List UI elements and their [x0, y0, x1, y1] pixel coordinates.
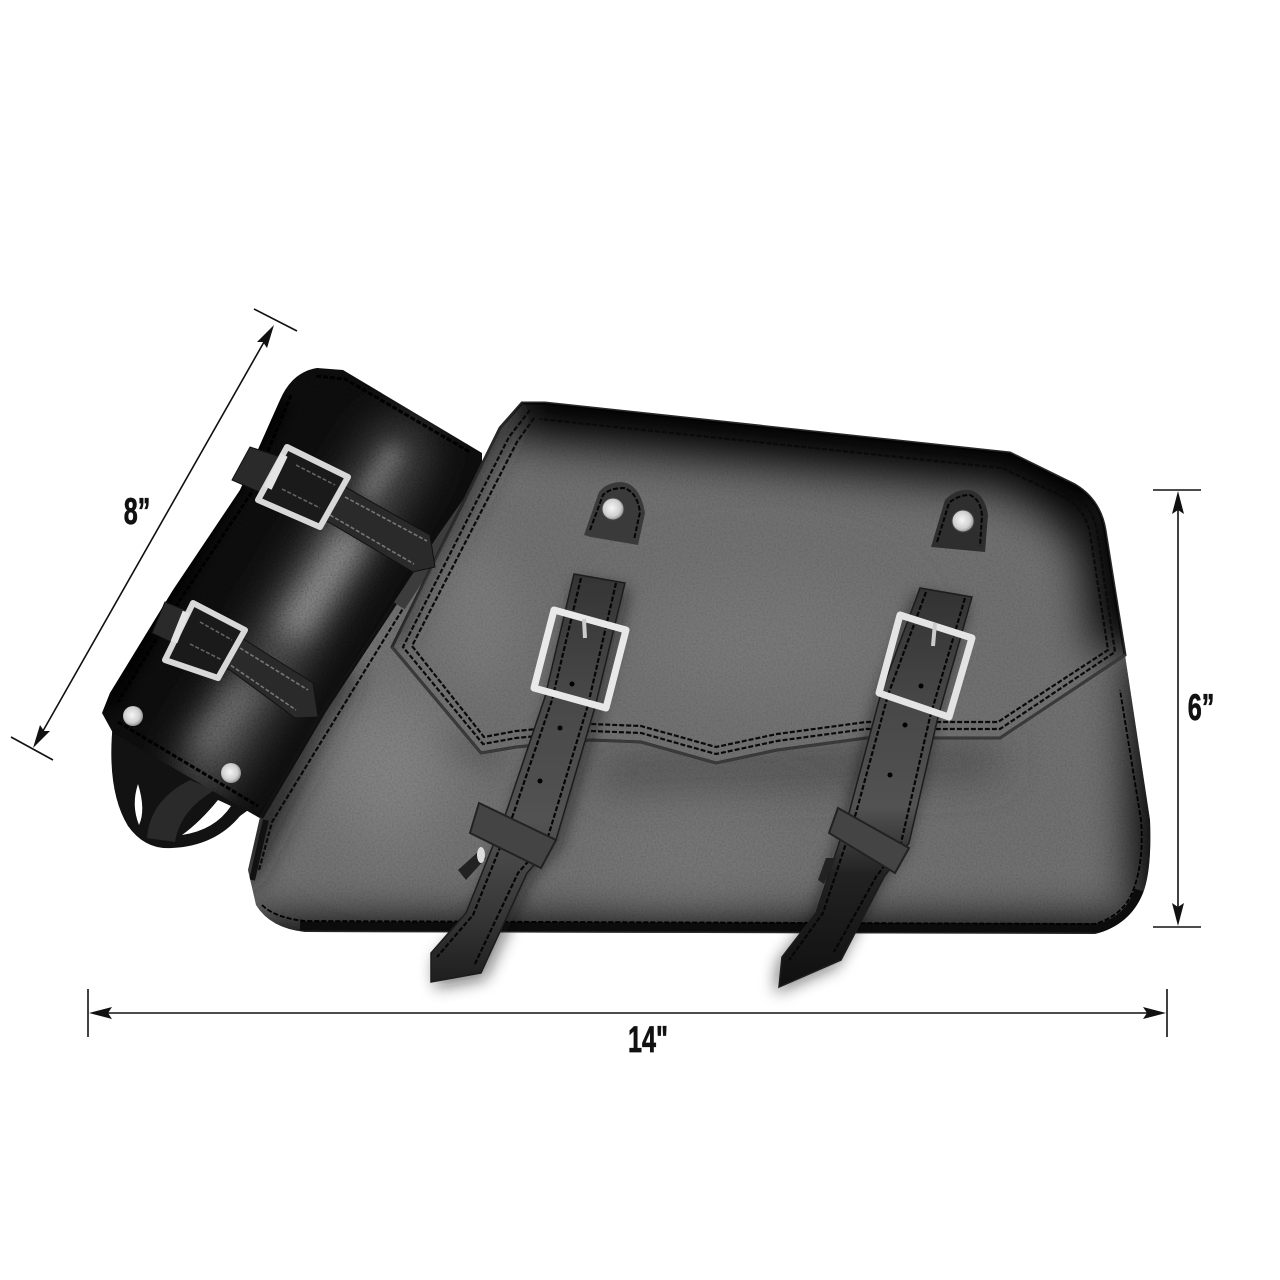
flap: double stitching: [403, 410, 1115, 754]
label: 14": [628, 1018, 668, 1060]
tool roll: rivets: [123, 706, 241, 783]
main bag: flap: [380, 385, 1142, 770]
label: 8”: [124, 490, 150, 532]
snap tab left: [584, 482, 645, 545]
tool roll: stitching: [118, 376, 470, 806]
rivet: [602, 498, 624, 520]
label: 6”: [1188, 686, 1214, 728]
main bag: body panel: [248, 500, 1150, 934]
tool roll: upper strap and buckle: [232, 447, 435, 572]
left strap with buckle and keeper: [431, 574, 629, 988]
dimension: 6 inch height: [1153, 490, 1214, 927]
tool roll: leather body: [100, 360, 490, 830]
tool roll: lower strap and buckle: [152, 602, 318, 718]
rivet: [952, 510, 974, 532]
infographic canvas: [10, 308, 1213, 1052]
tool roll: under-strap loop: [111, 722, 262, 848]
dimension: 8 inch roll length: [11, 309, 297, 760]
dimension: 14 inch width: [88, 989, 1167, 1060]
right strap with buckle and keeper: [775, 588, 972, 993]
snap tab right: [931, 490, 988, 552]
